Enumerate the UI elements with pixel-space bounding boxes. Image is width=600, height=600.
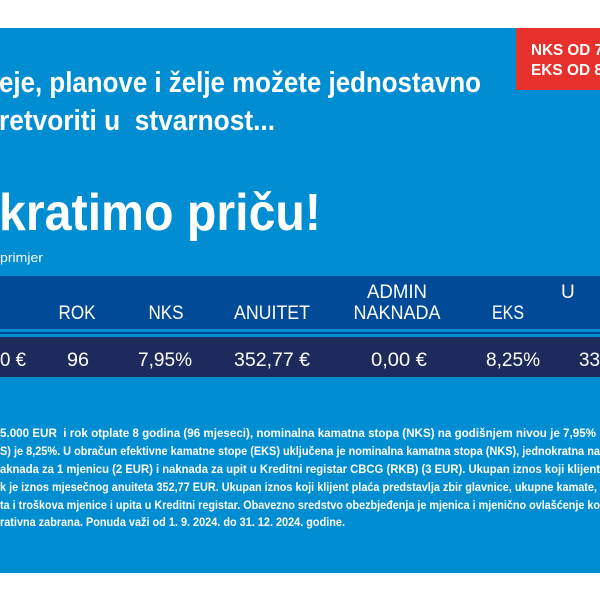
heading: intro [0, 67, 481, 137]
table row: 96 [67, 350, 89, 371]
table row: 33 [579, 350, 600, 371]
table header: EKS [492, 303, 524, 324]
title: kratimo priču! [0, 184, 321, 242]
heading: intro: eje, planove i želje možete jednostavno [0, 67, 481, 99]
table [0, 276, 600, 377]
table row: 352,77 € [234, 350, 310, 371]
disclaimer text: rativna zabrana. Ponuda važi od 1. 9. 2024. do 31. 12. 2024. godine. [0, 517, 345, 529]
disclaimer text [0, 428, 600, 529]
disclaimer text: aknada za 1 mjenicu (2 EUR) i naknada za upit u Kreditni registar CBCG (RKB) (3 EUR). Ukupan iznos koji klijent [0, 464, 600, 476]
table row: 8,25% [486, 350, 540, 371]
table row: 0 € [0, 350, 26, 371]
table header: U [561, 282, 575, 303]
table header: ANUITET [234, 303, 310, 324]
table row: 7,95% [138, 350, 192, 371]
heading: intro: retvoriti u stvarnost... [0, 105, 275, 137]
table row: 0,00 € [371, 350, 427, 371]
table header: NKS [148, 303, 184, 324]
table divider [0, 329, 600, 337]
disclaimer text: 5.000 EUR i rok otplate 8 godina (96 mjeseci), nominalna kamatna stopa (NKS) na godišnjem nivou je 7,95% [0, 428, 596, 440]
table header: ROK [58, 303, 96, 324]
subtitle: primjer [0, 250, 44, 265]
badge: interest rates [516, 28, 600, 90]
table header [0, 276, 600, 329]
table header: NAKNADA [354, 303, 441, 324]
table row [0, 337, 600, 377]
table header: ADMIN [367, 282, 427, 303]
